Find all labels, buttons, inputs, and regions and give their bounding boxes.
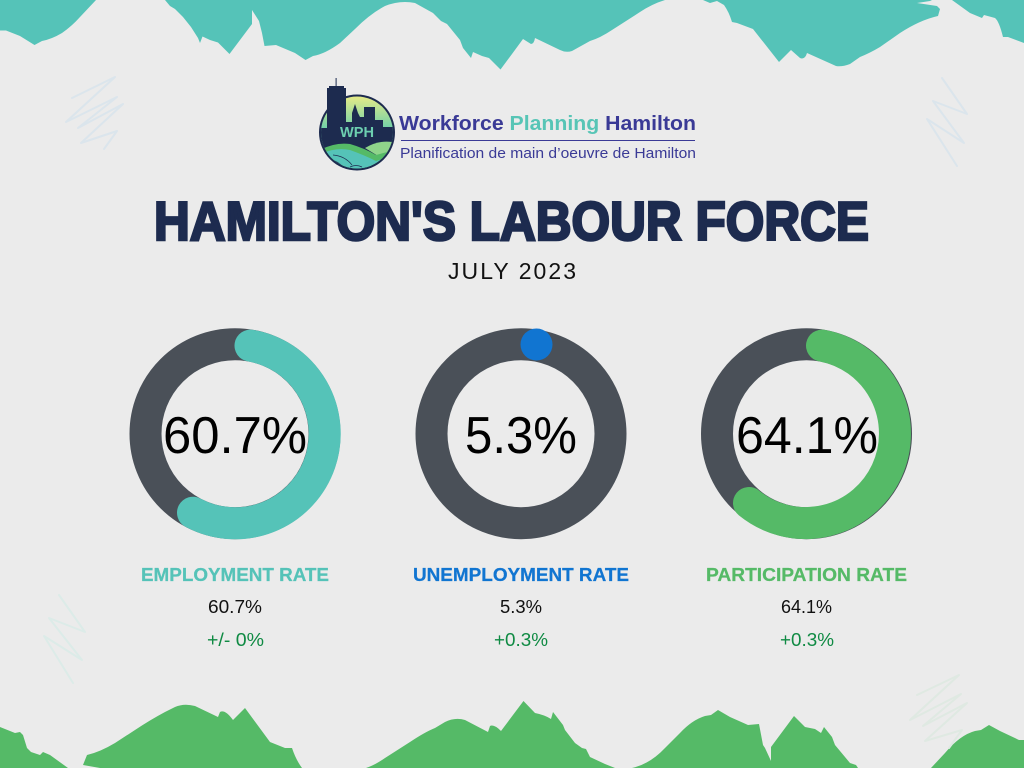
employment value: 60.7%: [208, 596, 262, 617]
scribble: top left: [66, 77, 123, 149]
donut chart: employment rate: [146, 344, 325, 523]
employment rate value: 60.7%: [163, 407, 307, 465]
scribble: bottom left: [44, 595, 85, 683]
employment change: +/- 0%: [207, 629, 264, 650]
logo wordmark: Workforce Planning Hamilton: [399, 112, 696, 135]
logo: [315, 78, 696, 176]
top teal torn border: [0, 0, 1024, 70]
scribble: bottom right: [910, 675, 967, 748]
participation label: PARTICIPATION RATE: [706, 564, 907, 585]
donut chart: participation rate: [717, 344, 896, 523]
scribble: top right: [927, 78, 967, 166]
unemployment value: 5.3%: [500, 596, 542, 617]
participation value: 64.1%: [781, 596, 832, 617]
logo emblem initials: WPH: [340, 124, 374, 141]
title: HAMILTON'S LABOUR FORCE: [154, 190, 869, 252]
stat: employment rate: [141, 564, 329, 650]
bottom green torn border: [0, 701, 1024, 768]
stat: participation rate: [706, 564, 907, 650]
unemployment rate value: 5.3%: [465, 407, 577, 465]
participation rate value: 64.1%: [736, 407, 878, 465]
donut chart: unemployment rate: [432, 328, 610, 523]
logo french tagline: Planification de main d’oeuvre de Hamilton: [400, 146, 696, 162]
employment label: EMPLOYMENT RATE: [141, 564, 329, 585]
stat: unemployment rate: [413, 564, 629, 650]
logo divider: [401, 140, 695, 141]
unemployment label: UNEMPLOYMENT RATE: [413, 564, 629, 585]
subtitle: date: JULY 2023: [448, 258, 576, 284]
participation change: +0.3%: [780, 629, 834, 650]
unemployment change: +0.3%: [494, 629, 548, 650]
logo emblem: [319, 78, 395, 170]
